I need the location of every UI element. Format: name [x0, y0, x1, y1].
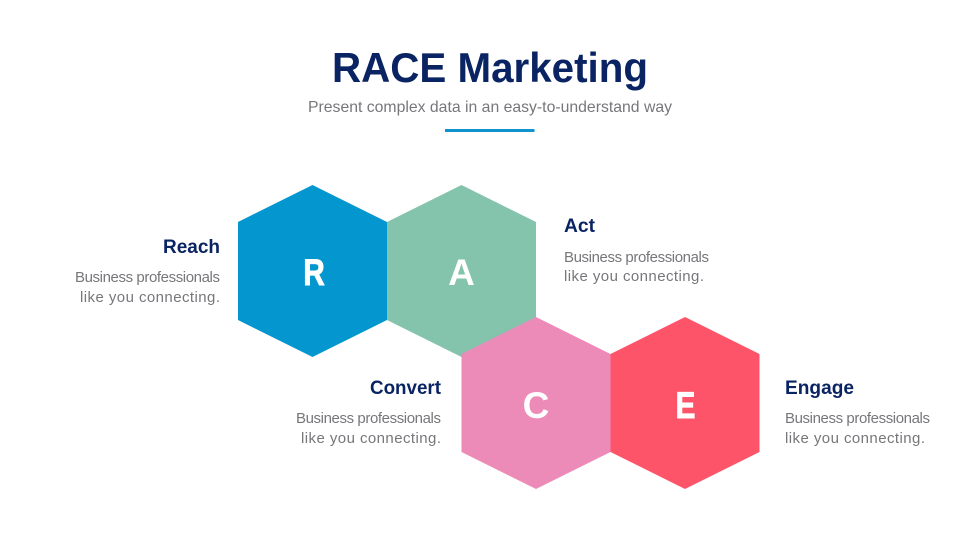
text block: Convert: Convert: [370, 378, 442, 399]
text block: Convert: like you connecting.: [301, 430, 441, 447]
text block: Act: like you connecting.: [564, 268, 704, 285]
text block: Convert: [296, 378, 442, 447]
hexagon: E: [610, 317, 760, 489]
hexagon: C: [462, 317, 610, 489]
text block: Reach: Business professionals: [75, 269, 220, 286]
text block: Act: Business professionals: [564, 249, 709, 266]
text block: Engage: Engage: [785, 378, 854, 399]
text block: Engage: Business professionals: [785, 410, 930, 427]
text block: Reach: Reach: [163, 237, 220, 258]
text block: Engage: like you connecting.: [785, 430, 925, 447]
text block: Act: Act: [564, 216, 596, 237]
subtitle: Present complex data in an easy-to-understand way: [308, 99, 672, 116]
hexagon: R: [238, 185, 387, 357]
hexagon: A: [387, 185, 536, 357]
title: RACE Marketing: [332, 44, 648, 91]
text block: Reach: like you connecting.: [80, 289, 220, 306]
text block: Engage: [785, 378, 930, 447]
text block: Reach: [75, 237, 220, 306]
hexagon: C: C: [523, 385, 549, 426]
title underline: [445, 129, 534, 132]
text block: Act: [564, 216, 709, 285]
text block: Convert: Business professionals: [296, 410, 441, 427]
hexagon: A: A: [448, 252, 475, 293]
hexagon: E: E: [676, 386, 695, 427]
hexagon: R: R: [303, 253, 325, 294]
